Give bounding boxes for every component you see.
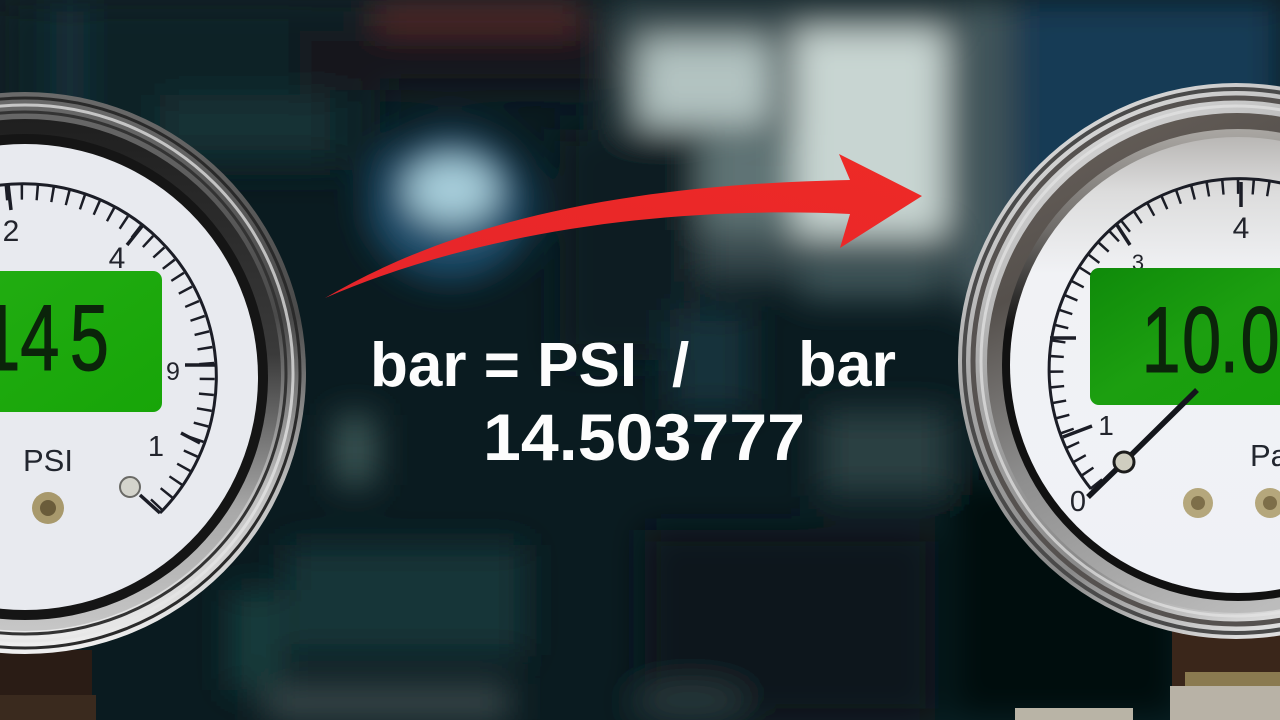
needle stub (120, 477, 140, 497)
LCD display (1090, 268, 1280, 405)
right pressure gauge (958, 83, 1280, 720)
left pressure gauge (0, 92, 306, 720)
formula text: bar (798, 330, 896, 400)
unit label: PSI (23, 443, 73, 478)
dial face (1010, 137, 1280, 593)
bezel (958, 83, 1280, 639)
major ticks (8, 184, 215, 513)
needle hub (1114, 452, 1134, 472)
needle (1088, 390, 1197, 497)
tick arc (0, 184, 216, 513)
right pressure gauge: 0 (1070, 486, 1086, 518)
bezel (0, 92, 306, 654)
left pressure gauge: 4 (109, 242, 125, 275)
screws (1183, 488, 1280, 518)
right pressure gauge: 1 (1098, 410, 1114, 441)
arrow: red curved (325, 154, 922, 298)
tick arc (1049, 179, 1280, 489)
formula text: / (672, 331, 689, 400)
LCD display (0, 271, 162, 412)
scale numbers: 2 (3, 215, 19, 248)
LCD reading: 10.0 (1142, 287, 1280, 392)
tick marks (1056, 186, 1280, 485)
screw (32, 492, 64, 524)
formula text (370, 330, 896, 474)
dial face (0, 144, 258, 610)
tick marks (0, 192, 207, 507)
formula text: 14.503777 (483, 400, 805, 474)
gauge stem (1015, 630, 1280, 720)
scale numbers: 4 (1233, 212, 1249, 245)
gauge stem (0, 650, 96, 720)
right pressure gauge: 3 (1132, 250, 1144, 275)
left pressure gauge: 1 (148, 431, 164, 463)
major ticks (1050, 182, 1241, 437)
formula text: bar = PSI (370, 331, 637, 400)
left pressure gauge: 9 (166, 358, 180, 386)
